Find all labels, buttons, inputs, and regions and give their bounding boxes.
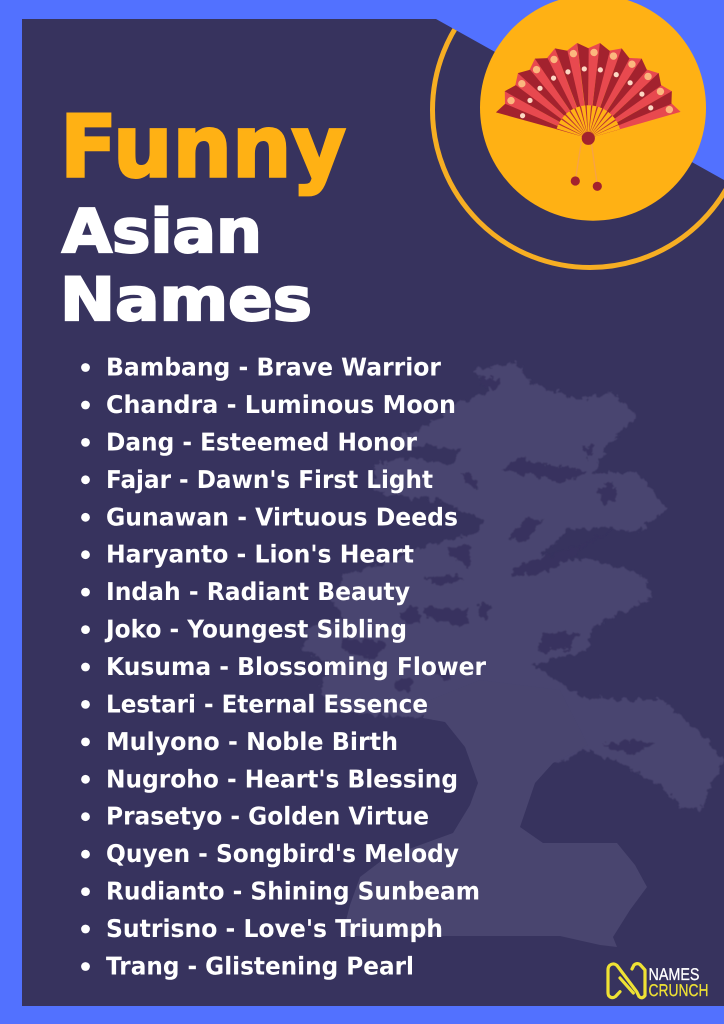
yellow circle (480, 0, 706, 221)
item: Trang: Trang - Glistening Pearl (106, 952, 414, 980)
item: Rudianto: Rudianto - Shining Sunbeam (106, 877, 480, 906)
title: Funny: Funny (60, 98, 346, 198)
ring: yellow arc (432, 0, 724, 268)
logo: Names Crunch (608, 964, 708, 1000)
icon: logo N mark (608, 964, 645, 998)
item: Gunawan: Gunawan - Virtuous Deeds (106, 502, 458, 531)
title: Names: Names (60, 266, 312, 335)
icon: red folding fan (496, 42, 681, 191)
item: Bambang: Bambang - Brave Warrior (106, 352, 442, 382)
item: Indah: Indah - Radiant Beauty (106, 577, 410, 606)
item: Chandra: Chandra - Luminous Moon (106, 390, 456, 419)
logo text: NAMES: NAMES (648, 965, 700, 984)
item: Quyen: Quyen - Songbird's Melody (106, 839, 459, 868)
item: Prasetyo: Prasetyo - Golden Virtue (106, 802, 429, 831)
logo text: CRUNCH: CRUNCH (648, 981, 708, 1000)
item: Kusuma: Kusuma - Blossoming Flower (106, 652, 487, 681)
item: Dang: Dang - Esteemed Honor (106, 427, 418, 456)
item: Nugroho: Nugroho - Heart's Blessing (106, 764, 458, 793)
item: Fajar: Fajar - Dawn's First Light (106, 465, 433, 494)
list of names (81, 352, 487, 980)
item: Haryanto: Haryanto - Lion's Heart (106, 540, 414, 569)
item: Sutrisno: Sutrisno - Love's Triumph (106, 914, 443, 943)
item: Lestari: Lestari - Eternal Essence (106, 689, 428, 718)
item: Joko: Joko - Youngest Sibling (104, 615, 407, 644)
title: Asian: Asian (62, 197, 262, 267)
item: Mulyono: Mulyono - Noble Birth (106, 727, 398, 756)
tree silhouette (302, 363, 723, 947)
